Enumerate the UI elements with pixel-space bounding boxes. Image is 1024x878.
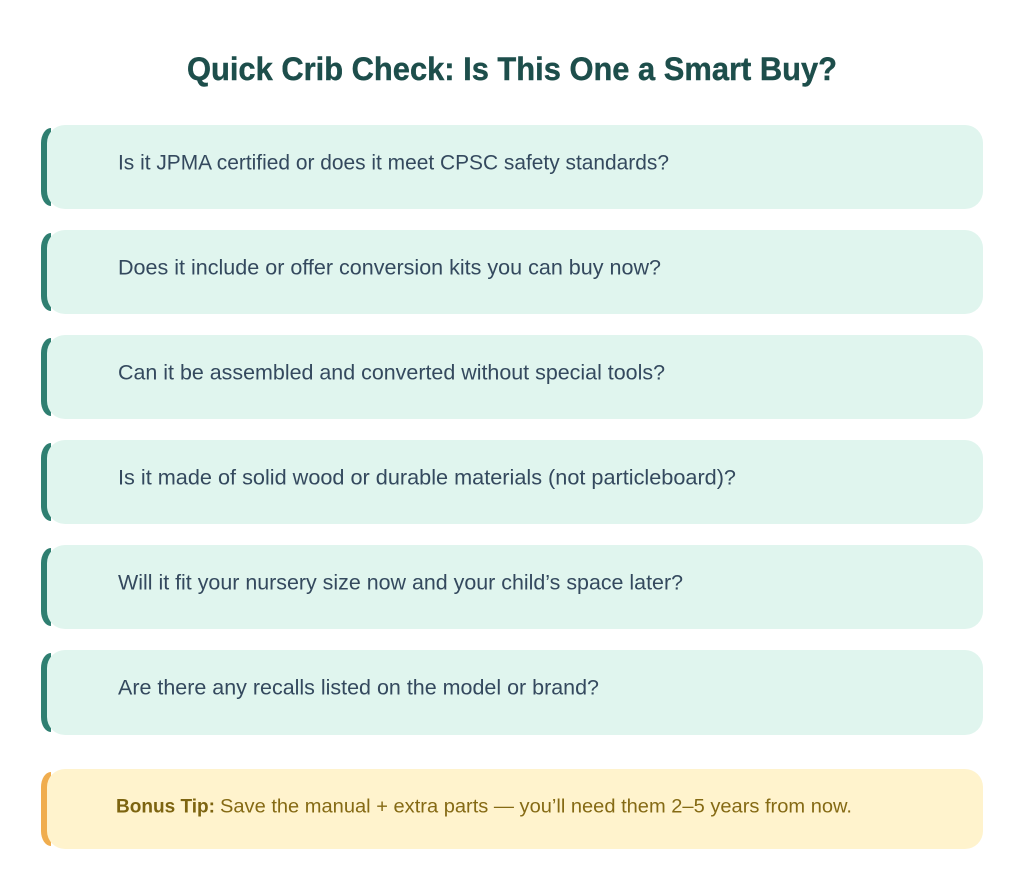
panel: question 6 <box>41 650 983 735</box>
panel: question 5 <box>41 545 983 629</box>
text: question 6: Are there any recalls listed on the model or brand? <box>118 676 599 700</box>
panel: question 4 <box>41 440 983 524</box>
panel: question 2 <box>41 230 983 314</box>
text: question 3: Can it be assembled and converted without special tools? <box>118 362 665 384</box>
text: question 2: Does it include or offer conversion kits you can buy now? <box>118 256 661 280</box>
title: Quick Crib Check: Is This One a Smart Buy? <box>187 51 837 87</box>
text: question 5: Will it fit your nursery size now and your child’s space later? <box>118 572 683 594</box>
panel: question 1 <box>41 125 983 209</box>
text: bonus tip label: Bonus Tip: <box>116 796 215 818</box>
text: question 4: Is it made of solid wood or durable materials (not particleboard)? <box>118 466 736 490</box>
panel: question 3 <box>41 335 983 419</box>
text: bonus tip body: Save the manual + extra parts — you’ll need them 2–5 years from now. <box>220 796 852 818</box>
panel: bonus tip <box>41 769 983 849</box>
text: question 1: Is it JPMA certified or does it meet CPSC safety standards? <box>118 152 669 174</box>
